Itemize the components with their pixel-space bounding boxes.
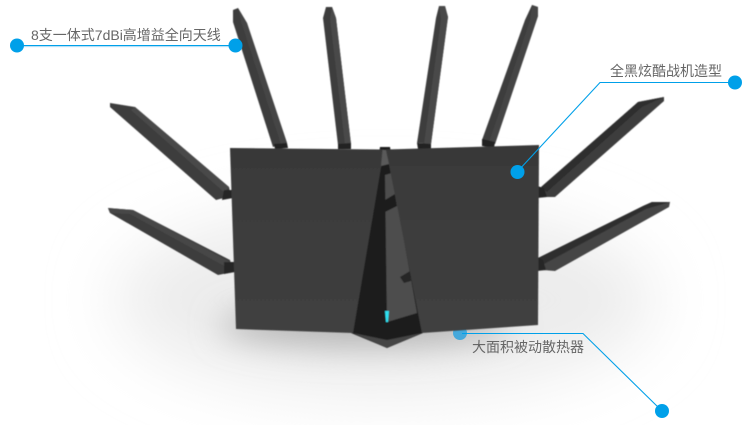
- callout: black styling: 全黑炫酷战机造型: [610, 63, 722, 79]
- callout: heat sink: [462, 334, 669, 418]
- floor shadow: [115, 205, 655, 395]
- antenna: top 1: [233, 8, 288, 149]
- callout: heat sink: 大面积被动散热器: [472, 339, 584, 355]
- antenna: right lower: [537, 202, 670, 271]
- callout: antennas: [10, 27, 242, 52]
- antenna: left lower: [108, 208, 235, 275]
- router underside: [351, 147, 423, 348]
- antenna: top 4: [482, 5, 538, 148]
- left panel: [230, 148, 384, 333]
- callout: antennas: 8支一体式7dBi高增益全向天线: [31, 27, 221, 43]
- inner lit facet: [385, 173, 417, 322]
- antenna: left upper: [110, 103, 233, 200]
- router: [108, 5, 670, 348]
- status led: [385, 311, 389, 322]
- callout dot: heat sink: [453, 326, 467, 340]
- small port: [400, 271, 411, 283]
- callout: black styling: [510, 63, 742, 179]
- antenna: top 3: [417, 6, 448, 149]
- antenna: top 2: [323, 7, 351, 149]
- dark band: [385, 194, 397, 212]
- lower chin: [353, 333, 422, 348]
- right panel: [386, 145, 539, 333]
- top sliver: [381, 150, 389, 166]
- antenna: right upper: [537, 97, 664, 198]
